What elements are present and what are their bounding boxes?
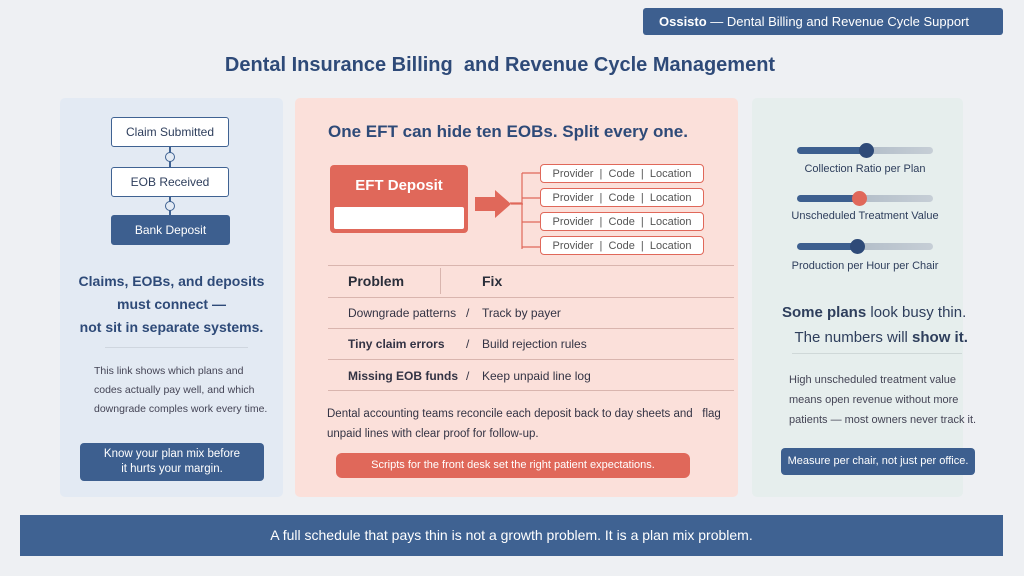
- slider 3: [797, 243, 933, 250]
- slider 2: [797, 195, 933, 202]
- text: Missing EOB funds: [348, 369, 458, 383]
- row 1: [348, 306, 561, 320]
- text: Track by payer: [482, 306, 561, 320]
- text: Tiny claim errors: [348, 337, 444, 351]
- body left: [94, 365, 267, 415]
- connector 1: [165, 147, 175, 167]
- box: claim submitted: Claim Submitted: [126, 125, 214, 139]
- split row 4: Provider | Code | Location: [552, 240, 692, 252]
- paragraph middle: Dental accounting teams reconcile each deposit back to day sheets and flag unpaid lines with clear proof for follow-up.: [327, 408, 721, 440]
- split row 3: Provider | Code | Location: [552, 216, 692, 228]
- branch lines: [510, 172, 540, 249]
- arrow: [475, 190, 523, 218]
- heading left: must connect —: [117, 296, 226, 312]
- label 2: Unscheduled Treatment Value: [791, 210, 939, 222]
- bottom banner: A full schedule that pays thin is not a growth problem. It is a plan mix problem.: [270, 527, 753, 543]
- row 3: [348, 369, 591, 383]
- heading middle: One EFT can hide ten EOBs. Split every one.: [328, 122, 688, 141]
- text: Keep unpaid line log: [482, 369, 591, 383]
- panel: left: [60, 98, 283, 497]
- text: Problem: [348, 273, 404, 289]
- button right: Measure per chair, not just per office.: [788, 455, 968, 467]
- slider 1: [797, 147, 933, 154]
- title: Dental Insurance Billing and Revenue Cycle Management: [225, 54, 775, 76]
- box: bank deposit: Bank Deposit: [135, 223, 206, 237]
- heading left: [79, 273, 264, 335]
- connector 2: [165, 197, 175, 215]
- button left: it hurts your margin.: [121, 463, 223, 475]
- label 1: Collection Ratio per Plan: [804, 163, 926, 175]
- box: EOB received: [111, 167, 229, 197]
- box: bank deposit: [111, 215, 230, 245]
- text: Build rejection rules: [482, 337, 587, 351]
- split row 3: [540, 212, 704, 231]
- split row 1: [540, 164, 704, 183]
- body left: downgrade comples work every time.: [94, 403, 267, 415]
- button middle: Scripts for the front desk set the right patient expectations.: [371, 459, 655, 471]
- heading right: Some plans look busy thin.: [782, 304, 966, 321]
- body right: High unscheduled treatment value means open revenue without more patients — most owners never track it.: [789, 374, 976, 426]
- EFT deposit box: EFT Deposit: [355, 177, 443, 194]
- text: /: [466, 337, 469, 351]
- heading left: not sit in separate systems.: [80, 319, 263, 335]
- body left: This link shows which plans and: [94, 365, 243, 377]
- split row 2: [540, 188, 704, 207]
- heading left: Claims, EOBs, and deposits: [79, 273, 264, 289]
- panel: right: [752, 98, 963, 497]
- button left: Know your plan mix before: [104, 448, 240, 460]
- header tag: [643, 8, 1003, 35]
- body left: codes actually pay well, and which: [94, 384, 255, 396]
- table header: [348, 273, 502, 289]
- split row 1: Provider | Code | Location: [552, 168, 692, 180]
- header tag: Ossisto — Dental Billing and Revenue Cycle Support: [659, 14, 969, 29]
- split row 2: Provider | Code | Location: [552, 192, 692, 204]
- heading right: [782, 304, 968, 346]
- text: /: [466, 369, 469, 383]
- label 3: Production per Hour per Chair: [792, 260, 938, 272]
- row 2: [348, 337, 587, 351]
- text: Downgrade patterns: [348, 306, 456, 320]
- text: /: [466, 306, 469, 320]
- bottom banner: [20, 515, 1003, 556]
- EFT deposit box: [330, 165, 468, 233]
- button right: [781, 448, 975, 475]
- box: claim submitted: [111, 117, 229, 147]
- heading right: The numbers will show it.: [794, 329, 968, 346]
- box: EOB received: EOB Received: [131, 175, 209, 189]
- panel: middle: [295, 98, 738, 497]
- split row 4: [540, 236, 704, 255]
- button middle: [336, 453, 690, 478]
- text: Fix: [482, 273, 502, 289]
- button left: [80, 443, 264, 481]
